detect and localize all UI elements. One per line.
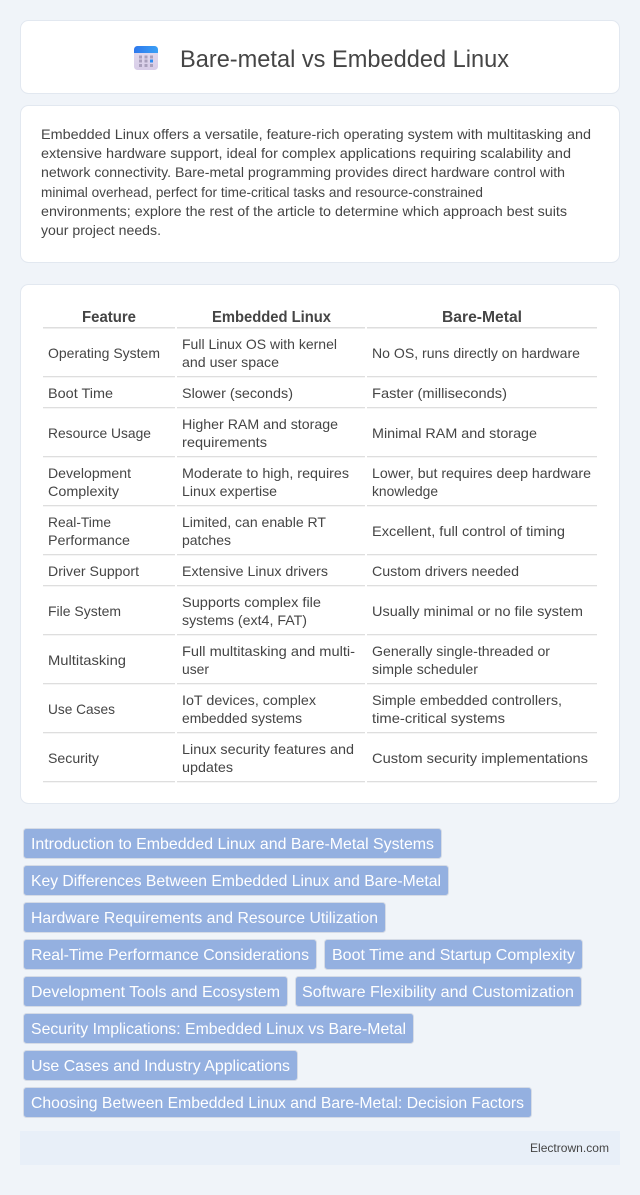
footer: Electrown.com <box>530 1141 609 1155</box>
table row: Operating System: Operating System <box>48 345 160 361</box>
table row: Real-Time Performance: Excellent, full control of timing <box>372 523 565 539</box>
table row: Real-Time Performance: Performance <box>48 532 130 548</box>
table row: Operating System: No OS, runs directly on hardware <box>372 345 580 361</box>
table row: File System: Supports complex file <box>182 594 321 610</box>
table row: Resource Usage: Resource Usage <box>48 425 151 441</box>
table row: Operating System: Full Linux OS with kernel <box>182 336 337 352</box>
table row: Development Complexity: Development <box>48 465 131 481</box>
table row: Real-Time Performance: patches <box>182 532 231 548</box>
table row: Security: Security <box>48 750 99 766</box>
table row: Resource Usage: Higher RAM and storage <box>182 416 338 432</box>
tag: Development Tools: Development Tools and Ecosystem <box>31 984 280 1001</box>
table row: Multitasking: Generally single-threaded or <box>372 643 550 659</box>
tag: Real-Time Performance <box>24 940 316 970</box>
text block: introduction paragraph: Embedded Linux offers a versatile, feature-rich operating system with multitasking and <box>41 126 591 142</box>
text block: introduction paragraph: your project needs. <box>41 222 161 238</box>
table row: Development Complexity: Linux expertise <box>182 483 277 499</box>
table row: File System: File System <box>48 603 121 619</box>
table row: Operating System <box>48 336 580 370</box>
table row: Development Complexity: Complexity <box>48 483 119 499</box>
text block: introduction paragraph: minimal overhead, perfect for time-critical tasks and resource-constrained <box>41 184 483 200</box>
table row: Boot Time: Faster (milliseconds) <box>372 385 507 401</box>
tag: Security Implications: Security Implications: Embedded Linux vs Bare-Metal <box>31 1021 406 1038</box>
table row: Use Cases: IoT devices, complex <box>182 692 316 708</box>
heading: title: Bare-metal vs Embedded Linux <box>180 46 509 73</box>
text block: introduction paragraph <box>41 126 591 238</box>
table row: Driver Support: Extensive Linux drivers <box>182 563 328 579</box>
tag: Key Differences <box>24 866 448 896</box>
table header row <box>82 309 522 326</box>
table row: Use Cases: embedded systems <box>182 710 302 726</box>
table header row: Bare-Metal <box>442 309 522 326</box>
panel: introduction <box>20 106 620 262</box>
table row: Real-Time Performance: Limited, can enable RT <box>182 514 326 530</box>
table row: Development Complexity: knowledge <box>372 483 438 499</box>
tag: Key Differences: Key Differences Between Embedded Linux and Bare-Metal <box>31 873 441 890</box>
table row: Operating System: and user space <box>182 354 279 370</box>
table row: Development Complexity: Moderate to high, requires <box>182 465 349 481</box>
tag: Development Tools <box>24 976 288 1006</box>
table row: Boot Time: Boot Time <box>48 385 113 401</box>
table row: Use Cases: Simple embedded controllers, <box>372 692 562 708</box>
tag: Hardware Requirements: Hardware Requirements and Resource Utilization <box>31 910 378 927</box>
table row: Resource Usage: requirements <box>182 434 267 450</box>
table header row: Embedded Linux <box>212 309 331 326</box>
table row: Use Cases: time-critical systems <box>372 710 505 726</box>
table row: File System: Usually minimal or no file system <box>372 603 583 619</box>
tag: Use Cases <box>24 1050 298 1080</box>
table row: Driver Support <box>48 563 519 579</box>
table row: Multitasking: Full multitasking and multi- <box>182 643 355 659</box>
section tags <box>24 828 582 1118</box>
icon: calendar <box>134 46 158 70</box>
table row: Security: Linux security features and <box>182 741 354 757</box>
tag: Software Flexibility: Software Flexibility and Customization <box>302 984 574 1001</box>
table row: Resource Usage: Minimal RAM and storage <box>372 425 537 441</box>
table row: Security: Custom security implementations <box>372 750 588 766</box>
text block: introduction paragraph: environments; explore the rest of the article to determine which approach best suits <box>41 203 567 219</box>
tag: Real-Time Performance: Real-Time Performance Considerations <box>31 947 309 964</box>
tag: Security Implications <box>24 1014 414 1044</box>
table row: Real-Time Performance: Real-Time <box>48 514 111 530</box>
tag: Introduction: Introduction to Embedded Linux and Bare-Metal Systems <box>31 836 434 853</box>
tag: Boot Time: Boot Time and Startup Complexity <box>332 947 575 964</box>
table row: File System <box>48 594 583 628</box>
table row: Boot Time: Slower (seconds) <box>182 385 293 401</box>
panel: comparison table <box>20 284 620 804</box>
footer <box>20 1131 620 1165</box>
tag: Hardware Requirements <box>24 902 386 932</box>
table row: Development Complexity <box>48 465 591 499</box>
tag: Introduction <box>24 828 442 858</box>
table row: File System: systems (ext4, FAT) <box>182 612 307 628</box>
tag: Boot Time <box>324 940 582 970</box>
tag: Decision Factors <box>24 1088 532 1118</box>
table row: Boot Time <box>48 385 507 401</box>
table header row: Feature <box>82 309 136 326</box>
table row: Use Cases <box>48 692 562 726</box>
tag: Decision Factors: Choosing Between Embedded Linux and Bare-Metal: Decision Factors <box>31 1095 524 1112</box>
text block: introduction paragraph: network connectivity. Bare-metal programming provides direct hardware control with <box>41 164 565 180</box>
table row: Use Cases: Use Cases <box>48 701 115 717</box>
table row: Multitasking: user <box>182 661 209 677</box>
tag: Use Cases: Use Cases and Industry Applications <box>31 1058 290 1075</box>
text block: introduction paragraph: extensive hardware support, ideal for complex applications requiring scalability and <box>41 145 571 161</box>
table row: Real-Time Performance <box>48 514 565 548</box>
table row: Resource Usage <box>48 416 537 450</box>
table row: Multitasking: Multitasking <box>48 652 126 668</box>
tag: Software Flexibility <box>296 976 582 1006</box>
table row: Driver Support: Driver Support <box>48 563 139 579</box>
panel: title card <box>20 20 620 94</box>
table row: Development Complexity: Lower, but requires deep hardware <box>372 465 591 481</box>
table row: Security <box>48 741 588 775</box>
table row: Security: updates <box>182 759 233 775</box>
table row: Multitasking: simple scheduler <box>372 661 478 677</box>
table row: Driver Support: Custom drivers needed <box>372 563 519 579</box>
table row: Multitasking <box>48 643 550 677</box>
